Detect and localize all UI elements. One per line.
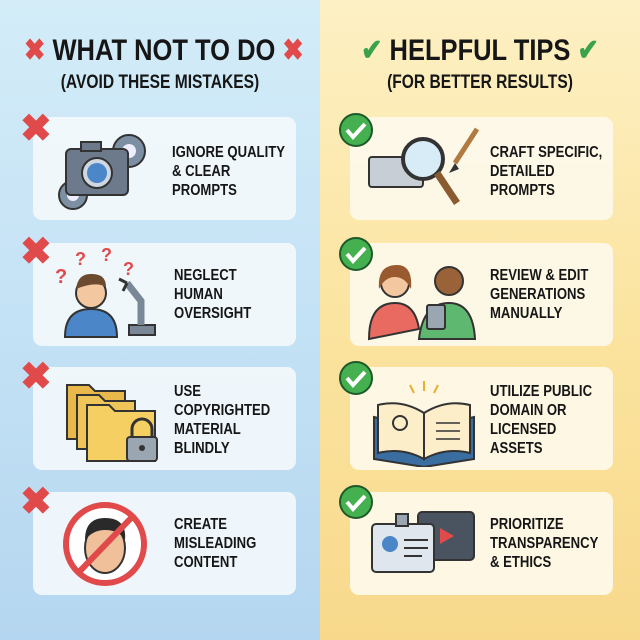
badges: red x marks: ✖ — [20, 231, 52, 273]
icon: camera with gears — [58, 134, 146, 210]
text — [174, 383, 270, 457]
text: UTILIZE PUBLIC — [490, 383, 592, 400]
text — [174, 267, 252, 322]
card: neglect oversight — [33, 243, 296, 346]
text: TRANSPARENCY — [490, 535, 598, 552]
text: OVERSIGHT — [174, 305, 251, 322]
icon: confused person and robot arm: ? — [101, 245, 112, 265]
title: what not to do: ✖ WHAT NOT TO DO ✖ — [24, 34, 304, 67]
text: PROMPTS — [490, 182, 555, 199]
text: MATERIAL — [174, 421, 241, 438]
text: & CLEAR — [172, 163, 230, 180]
text: MISLEADING — [174, 535, 256, 552]
card: ignore quality — [33, 117, 296, 220]
title: helpful tips: ✔ HELPFUL TIPS ✔ — [361, 34, 599, 67]
icon: two people handshake — [368, 265, 476, 340]
text — [172, 144, 285, 199]
badges: green checks — [339, 113, 373, 519]
card: copyrighted material — [33, 367, 296, 470]
text: CREATE — [174, 516, 227, 533]
text: ASSETS — [490, 440, 542, 457]
badges: red x marks: ✖ — [20, 481, 52, 523]
subtitle: for better results: (FOR BETTER RESULTS) — [387, 72, 573, 93]
text — [490, 267, 588, 322]
card: review edit — [350, 243, 613, 346]
icon: confused person and robot arm: ? — [55, 266, 67, 288]
text — [490, 516, 598, 571]
card: public domain — [350, 367, 613, 470]
icon: folders with lock — [66, 384, 158, 462]
icon: keyboard magnifier brush — [368, 128, 479, 205]
badges: red x marks — [20, 108, 52, 523]
card: misleading content — [33, 492, 296, 595]
text: CRAFT SPECIFIC, — [490, 144, 602, 161]
text: DETAILED — [490, 163, 555, 180]
text: PRIORITIZE — [490, 516, 564, 533]
badges: red x marks: ✖ — [20, 108, 52, 150]
text: GENERATIONS — [490, 286, 585, 303]
panel: right column tips — [339, 113, 613, 595]
text: BLINDLY — [174, 440, 230, 457]
card: transparency — [350, 492, 613, 595]
icon: id card and video — [371, 511, 475, 573]
text: CONTENT — [174, 554, 237, 571]
icon: prohibited face — [63, 502, 147, 586]
text: IGNORE QUALITY — [172, 144, 285, 161]
text: COPYRIGHTED — [174, 402, 270, 419]
text: USE — [174, 383, 201, 400]
icon: confused person and robot arm — [55, 245, 156, 338]
card: craft prompts — [350, 117, 613, 220]
panel: left column mistakes — [20, 108, 296, 595]
subtitle: avoid these mistakes: (AVOID THESE MISTAKES) — [61, 72, 259, 93]
icon: open book — [373, 381, 475, 467]
text — [490, 144, 602, 199]
text — [490, 383, 592, 457]
icon: confused person and robot arm: ? — [75, 249, 86, 269]
text: HUMAN — [174, 286, 223, 303]
text: LICENSED — [490, 421, 556, 438]
text — [174, 516, 256, 571]
text: MANUALLY — [490, 305, 562, 322]
text: NEGLECT — [174, 267, 237, 284]
icon: confused person and robot arm: ? — [123, 259, 134, 279]
badges: red x marks: ✖ — [20, 356, 52, 398]
text: REVIEW & EDIT — [490, 267, 588, 284]
text: DOMAIN OR — [490, 402, 567, 419]
text: PROMPTS — [172, 182, 237, 199]
text: & ETHICS — [490, 554, 551, 571]
